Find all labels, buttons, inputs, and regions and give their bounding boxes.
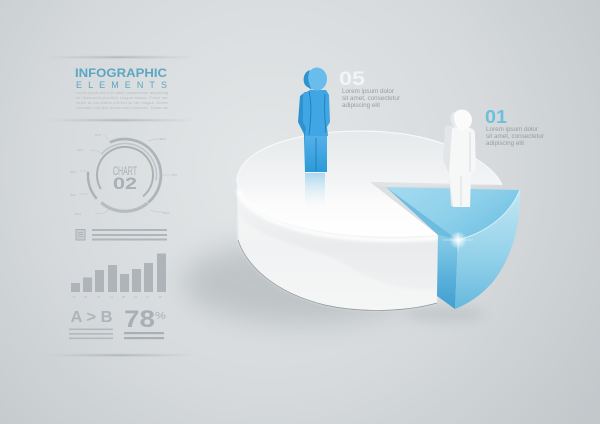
stat: A greater than B (69, 309, 113, 339)
callout: 01: 01 (485, 107, 507, 127)
callout: 01: sit amet, consectetur (486, 133, 545, 140)
callout: 05 (339, 69, 401, 109)
bar chart: 09 (122, 295, 126, 299)
icon: woman figure (298, 68, 330, 172)
text block: sidebar intro (76, 91, 168, 110)
chart: donut chart 02: CHART (113, 164, 137, 178)
chart: donut chart 02: 10% (95, 133, 101, 137)
stat: 78 percent (124, 306, 166, 339)
chart: donut chart 02: 02 (113, 174, 137, 193)
pie shadow (182, 240, 485, 324)
bar chart: 11 (110, 295, 113, 299)
callout: 01: Lorem ipsum dolor (486, 126, 539, 133)
callout: 01: adipiscing elit (486, 140, 524, 147)
stat: 78 percent: % (155, 311, 166, 322)
bar chart: 06 (84, 295, 88, 299)
white pie side (237, 183, 438, 310)
bar chart: 15 (158, 295, 162, 299)
bar chart: 12 (146, 295, 150, 299)
chart: donut chart 02: 50% (75, 212, 81, 216)
chart: donut chart 02: 70% (171, 173, 177, 177)
icon: man figure (443, 110, 476, 207)
bar chart: 10 (134, 295, 138, 299)
bar chart: 04 (72, 295, 76, 299)
callout: 05: Lorem ipsum dolor (342, 88, 395, 95)
bar chart (71, 254, 166, 299)
icon: document (76, 230, 85, 240)
chart: donut chart 02: 20% (77, 148, 83, 152)
panel: left sidebar (45, 56, 195, 356)
text block: sidebar intro: elit Maecenas porttitor congue massa. Fusce nec (76, 96, 168, 100)
callout: 01 (485, 107, 545, 147)
blue slice (386, 187, 458, 240)
reflection: woman (305, 173, 325, 213)
bar chart: 07 (97, 295, 101, 299)
chart: donut chart 02: 80% (163, 211, 169, 215)
callout: 05: 05 (339, 69, 366, 90)
chart: donut chart 02 (70, 133, 177, 216)
text block: sidebar intro: convallis volutpat ipsum sed commodo. Donec ac (76, 106, 168, 110)
heading: infographic elements: ELEMENTS (76, 80, 167, 90)
white pie top surface (237, 131, 502, 237)
heading: infographic elements (75, 67, 168, 90)
heading: infographic elements: INFOGRAPHIC (75, 67, 168, 80)
text lines: document caption (92, 229, 167, 240)
stat: A greater than B: A > B (70, 309, 112, 326)
chart: donut chart 02: 40% (70, 193, 76, 197)
text block: sidebar intro: lorem ac dui mattis ultrices at nec magna. Donec (76, 101, 168, 105)
highlight on blue corner (443, 231, 473, 252)
stat: 78 percent: 78 (124, 306, 155, 333)
callout: 05: sit amet, consectetur (342, 95, 401, 102)
text block: sidebar intro: Lorem ipsum dolor sit amet consectetuer adipiscing (76, 91, 168, 95)
chart: donut chart 02: 60% (160, 137, 166, 141)
callout: 05: adipiscing elit (342, 102, 380, 109)
pie chart (237, 131, 520, 310)
chart: donut chart 02: 30% (70, 170, 76, 174)
